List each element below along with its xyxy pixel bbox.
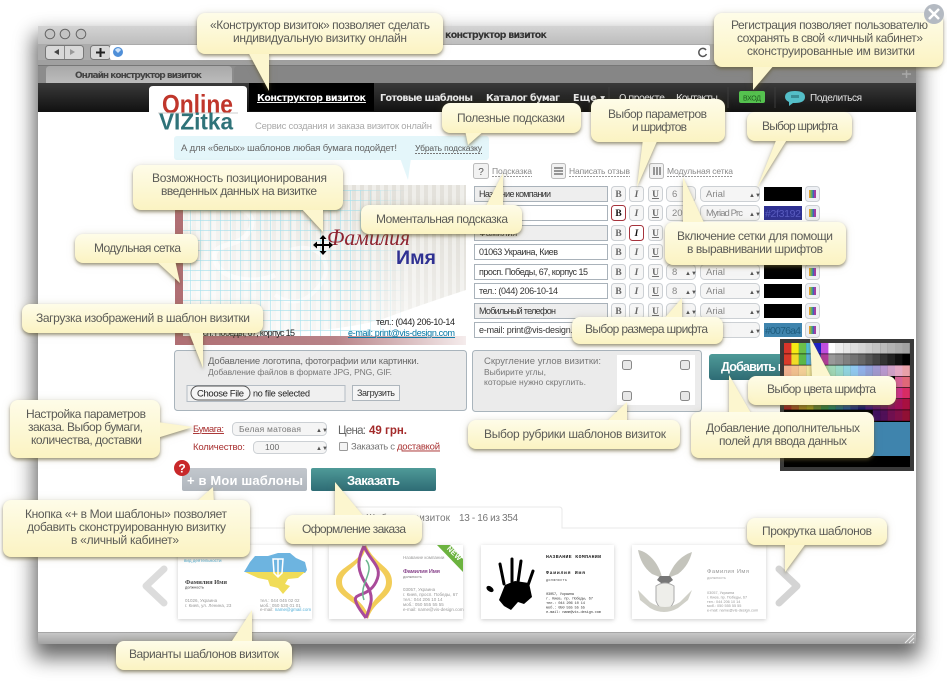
business card preview: Фамилия [327,225,410,250]
callout: instant hint [361,173,522,234]
template card: swirl with NEW badge: 03057, Украина [403,587,436,592]
template card: eagle [632,545,766,619]
form row 5: B [615,268,622,278]
order settings: Цена: [338,425,366,437]
form row 7: B [615,307,622,317]
template card: handprint: e-mail: name@vis-design.com [546,610,602,615]
navigation bar: ВХОД [743,96,761,102]
callout: order processing [285,482,422,544]
template tab header: Шаблоны визиток [366,512,451,524]
template card: eagle: моб.: 050 555 55 55 [707,604,741,608]
order settings: 49 грн. [369,425,407,437]
callout: template scroll [747,518,887,572]
form row 5: ▲▼ [749,271,761,277]
callout: my templates button: Кнопка «+ в Мои шаблоны» позволяет [25,507,228,521]
form row 8: #0076a4 [765,325,801,337]
callout: font size: Выбор размера шрифта [585,322,708,336]
callout: extra fields [691,375,874,458]
form row 6: 8 [672,286,677,297]
browser window: Онлайн конструктор визиток [75,71,202,81]
navigation bar: Поделиться [810,93,862,104]
callout: parameters and fonts: Выбор параметров [608,107,707,121]
form row 1: Arial [706,189,725,200]
template card: handprint: Фамилия Имя [546,570,585,576]
form row 1: ▲▼ [749,193,761,199]
form row 7: I [634,307,639,317]
callout: positioning: Возможность позиционирования [152,171,327,185]
form row 2: Имя [479,208,497,218]
template card: swirl with NEW badge: г. Киев, просп. Победы, 67 [403,592,458,597]
form row 2: ▲▼ [749,212,761,218]
panel: card corner rounding: которые нужно скруглить. [484,377,586,387]
hint bar: А для «белых» шаблонов любая бумага подойдет! [181,143,397,154]
callout: modular grid: Модульная сетка [94,241,181,255]
order settings: ▲▼ [316,446,328,452]
callout: order processing: Оформление заказа [302,522,406,536]
form row 8 [474,322,820,338]
logo: VIZitka [159,108,233,134]
template card: handprint: моб.: 050 555 55 55 [546,606,586,610]
form row 1: B [615,190,622,200]
form row 4: 01063 Украина, Киев [479,247,558,257]
template card: Ukraine: e-mail: name@gmail.com [260,607,311,612]
callout: useful hints: Полезные подсказки [457,111,565,125]
callout: my templates button: в «личный кабинет» [71,533,179,547]
template card: eagle: должность [707,576,726,580]
toolbar links: ? [478,167,484,178]
hint bar [174,136,489,180]
form row 6: I [634,287,639,297]
form row 6: ▲▼ [749,290,761,296]
form row 5: U [652,268,659,278]
form row 7: ▲▼ [685,310,697,316]
logo: Online [162,89,233,119]
form row 3: I [634,229,639,239]
order settings: доставкой [397,442,440,452]
navigation bar: Еще ▾ [573,93,605,104]
callout: card constructor: «Конструктор визиток» позволяет сделать [210,18,430,32]
browser window: конструктор визиток [445,30,548,41]
template card: handprint [481,545,614,619]
form row 2: I [634,209,639,219]
callout: template variants [116,610,292,670]
form row 5 [474,264,820,280]
template card: swirl with NEW badge: NEW [445,545,462,563]
form row 7: Arial [706,306,725,317]
template card: handprint: НАЗВАНИЕ КОМПАНИИ [546,554,601,560]
icon: red help badge [174,460,190,476]
callout: order settings: количества, доставки [31,433,142,447]
template card: handprint: тел.: 044 206 10 14 [546,602,586,606]
form row 4: B [615,248,622,258]
callout: registration: Регистрация позволяет пользователю [731,18,928,32]
form row 6 [474,284,820,298]
form row 6: Arial [706,286,725,297]
callout: instant hint: Моментальная подсказка [376,212,508,226]
callout: image upload [22,304,263,368]
order settings: Количество: [193,442,245,453]
navigation bar: Конструктор визиток [257,93,367,104]
form row 5: Arial [706,267,725,278]
template card: eagle: тел.: 044 206 10 14 [707,600,740,604]
form row 1: Название компании [479,189,551,199]
template card: handprint: 03057, Украина [546,593,575,597]
icon: close button [924,4,944,24]
form row 2: U [652,209,659,219]
logo [149,86,247,134]
form row 1 [474,186,820,202]
template card: eagle: Фамилия Имя [707,569,749,575]
callout: template variants: Варианты шаблонов визиток [129,647,280,661]
template card: swirl with NEW badge: Название компании [403,555,445,560]
template card: eagle: г. Киев, пр. Победы, 67 [707,596,747,600]
callout: registration [714,13,943,90]
icon: red help badge: ? [178,462,186,476]
template tab header: 13 - 16 из 354 [459,513,518,524]
form row 5: I [634,268,639,278]
callout: image upload: Загрузка изображений в шаблон визитки [36,311,250,325]
order settings: 100 [265,442,279,452]
callout: positioning [133,165,343,232]
panel: image upload [174,350,466,410]
button: order [311,468,436,491]
callout: parameters and fonts [591,99,725,187]
callout: grid toggle [665,177,846,265]
callout: order settings: Настройка параметров [26,407,146,421]
panel: image upload: Добавление файлов в формате JPG, PNG, GIF. [208,367,392,377]
button: add field [709,354,805,380]
template card: handprint: г. Киев, пр. Победы, 67 [546,596,593,602]
panel: image upload: Choose File [197,388,244,400]
callout: template category: Выбор рубрики шаблонов визиток [484,427,667,441]
callout: my templates button: добавить сконструированную визитку [27,520,226,534]
panel: card corner rounding: Скругление углов визитки: [484,356,601,367]
form row 7: ▲▼ [749,310,761,316]
panel: image upload: no file selected [253,388,310,398]
business card preview: тел.: (044) 206-10-14 [376,317,455,327]
template card: swirl with NEW badge: Фамилия Имя [403,569,440,575]
panel: image upload: Загрузить [357,388,395,398]
template card: Ukraine: 01026, Украина [185,598,218,603]
callout: card constructor [197,13,443,91]
template card: Ukraine [178,545,312,619]
navigation bar: Готовые шаблоны [380,93,473,104]
form row 4: U [652,248,659,258]
template card: handprint: должность [546,579,567,583]
panel: card corner rounding [472,350,702,412]
toolbar links [474,164,733,178]
form row 6: ▲▼ [685,290,697,296]
icon: move cursor [313,235,333,255]
callout: font size [572,298,723,344]
toolbar links: Модульная сетка [667,166,733,176]
template card: Ukraine: Фамилия Имя [185,579,227,586]
template tab header [250,507,745,528]
template card: Ukraine: тел.: 044 045 02 02 [260,598,300,603]
button: add to my templates: + в Мои шаблоны [187,473,303,488]
form row 3: B [615,229,622,239]
callout: positioning: введенных данных на визитке [161,184,317,198]
navigation bar [249,83,862,111]
callout: order settings [10,400,193,458]
panel: image upload: Добавление логотипа, фотографии или картинки. [208,356,419,367]
form row 7 [474,304,820,318]
callout: font color: Выбор цвета шрифта [767,382,876,396]
form row 6: U [652,287,659,297]
form row 1: 6 [672,189,677,200]
button: add field: Добавить поле [721,360,805,374]
template card: Ukraine: должность [185,586,204,590]
template card: Ukraine: вид деятельности [184,558,222,563]
navigation bar: О проекте [619,93,665,104]
form row 1: U [652,190,659,200]
form row 2: B [615,209,622,219]
form row 2: 20 [672,208,683,219]
toolbar links: Написать отзыв [569,166,630,176]
template card: swirl with NEW badge: должность [403,575,422,579]
callout: extra fields: Добавление дополнительных [706,421,860,435]
form row 4 [474,244,662,260]
callout: grid toggle: Включение сетки для помощи [677,229,833,243]
form row 5: ▲▼ [685,271,697,277]
form row 2: #2f3192 [765,208,801,220]
callout: font color [748,337,896,405]
form row 8: ▲▼ [749,329,761,335]
callout: my templates button [3,487,250,557]
form row 4: I [634,248,639,258]
order settings: Заказать с [351,442,395,452]
form row 8: e-mail: print@vis-design. [479,325,573,335]
form row 2: Myriad Prc [706,208,743,219]
navigation bar: Контакты [676,93,718,104]
template card: Ukraine: моб.: 050 530 01 01 [260,603,301,608]
callout: card constructor: индивидуальную визитку онлайн [233,31,407,45]
callout: useful hints [442,103,581,145]
template card: eagle: 03057, Украина [707,591,735,595]
business card preview: Имя [396,248,436,269]
form row 6: B [615,287,622,297]
form row 3 [474,226,662,240]
business card preview: e-mail: print@vis-design.com [348,328,455,338]
form row 1: I [634,190,639,200]
callout: parameters and fonts: и шрифтов [632,120,687,134]
template card: swirl with NEW badge [329,545,464,619]
order settings [193,422,440,454]
arrow: scroll right [779,569,797,603]
order settings: Белая матовая [239,424,301,434]
template card: swirl with NEW badge: e-mail: name@vis-design.com [403,607,464,612]
callout: font choice: Выбор шрифта [762,119,838,133]
panel: card corner rounding: Выбирите углы, [484,367,546,377]
template card: swirl with NEW badge: тел.: 044 206 10 14 [403,597,443,602]
form row 6: тел.: (044) 206-10-14 [479,286,558,296]
callout: template category [468,402,680,449]
form row 5: просп. Победы, 67, корпус 15 [479,267,588,277]
button: order: Заказать [347,473,400,488]
business card preview: просп. Победы, 67, корпус 15 [190,328,295,338]
template card: eagle: e-mail: name@vis-design.com [707,608,758,612]
form row 3: Фамилия [479,228,517,238]
callout: modular grid [75,234,198,283]
business card preview [175,185,466,345]
form row 7: U [652,307,659,317]
template card: swirl with NEW badge: моб.: 050 555 55 55 [403,602,444,607]
callout: registration: сконструированные им визитки [747,44,915,58]
hint bar: Убрать подсказку [415,143,483,153]
button: add to my templates [182,468,307,491]
callout: template scroll: Прокрутка шаблонов [762,524,872,538]
order settings: ▲▼ [316,428,328,434]
color picker [780,339,914,471]
order settings: Бумага: [193,424,224,435]
arrow: scroll left [146,569,164,603]
callout: order settings: заказа. Выбор бумаги, [28,420,143,434]
toolbar links: Подсказка [492,166,532,176]
callout: extra fields: полей для ввода данных [719,434,847,448]
form row 5: 8 [672,267,677,278]
tagline: Сервис создания и заказа визиток онлайн [255,121,432,132]
template card: Ukraine: г. Киев, ул. Ленина, 23 [185,603,232,608]
navigation bar: Каталог бумаг [486,93,560,104]
callout: font choice [747,112,852,188]
form row 3: U [652,229,659,239]
callout: registration: сохранять в свой «личный кабинет» [737,31,923,45]
form row 2 [474,206,820,220]
form row 7: Мобильный телефон [479,306,556,316]
callout: grid toggle: в выравнивании шрифтов [687,242,823,256]
